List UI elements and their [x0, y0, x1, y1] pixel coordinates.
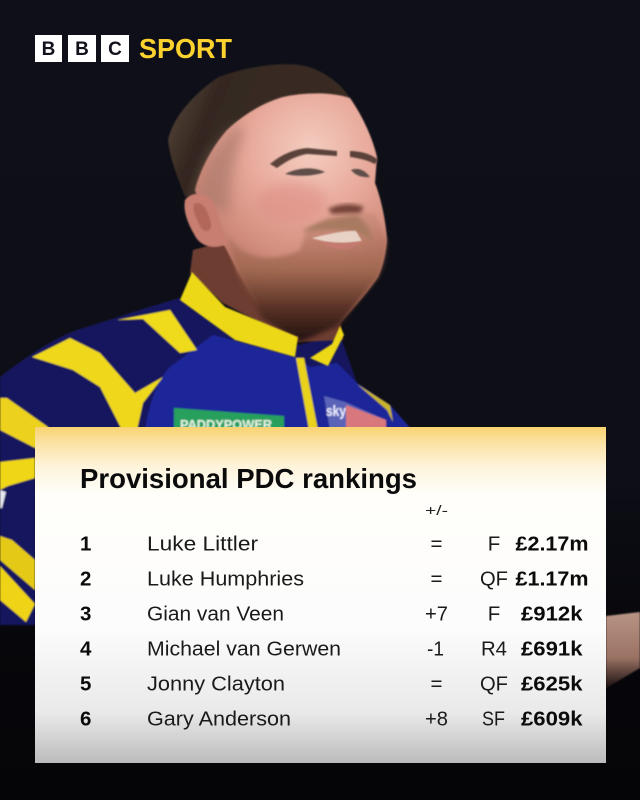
logo: BBC Sport: B	[75, 39, 89, 60]
row 1: £2.17m	[516, 532, 588, 556]
row 4: R4	[481, 638, 507, 660]
row 2	[80, 568, 588, 590]
neck	[190, 240, 343, 342]
row 6	[80, 708, 583, 730]
photo: player	[0, 64, 412, 625]
row 6: +8	[425, 708, 448, 730]
row 2: Luke Humphries	[147, 568, 304, 590]
row 6: SF	[482, 708, 505, 730]
ear inner	[194, 203, 211, 231]
hair	[168, 64, 350, 197]
collar	[180, 272, 344, 366]
row 1: =	[431, 532, 442, 556]
photo: arm at right	[606, 612, 640, 688]
row 2: £1.17m	[516, 568, 588, 590]
logo: BBC Sport	[35, 33, 232, 64]
cheek	[258, 182, 326, 222]
row 4	[80, 638, 583, 660]
eyes	[285, 168, 370, 177]
nose shadow	[328, 204, 364, 214]
row 3: F	[488, 602, 500, 626]
row 3	[80, 602, 583, 626]
eyebrows	[270, 148, 378, 168]
row 1: F	[488, 532, 500, 556]
mouth	[312, 231, 362, 243]
logo: BBC Sport: B	[42, 39, 55, 60]
logo: BBC Sport: SPORT	[139, 33, 232, 64]
row 4: £691k	[521, 638, 583, 660]
row 2: QF	[480, 568, 508, 590]
row 4: 4	[80, 638, 92, 660]
row 5: QF	[480, 672, 508, 696]
row 3: +7	[425, 602, 448, 626]
jersey: PADDYPOWER	[180, 417, 273, 432]
row 5	[80, 672, 583, 696]
row 4: -1	[427, 638, 444, 660]
row 6: Gary Anderson	[147, 708, 291, 730]
jersey: sky	[326, 403, 347, 420]
moustache	[302, 215, 373, 243]
row 2: 2	[80, 568, 91, 590]
logo: BBC Sport: C	[108, 39, 122, 60]
ear	[184, 194, 227, 247]
row 3: 3	[80, 602, 91, 626]
row 3: Gian van Veen	[147, 602, 284, 626]
beard	[227, 212, 387, 342]
row 5: 5	[80, 672, 91, 696]
face	[195, 93, 387, 337]
panel: rankings table	[35, 427, 606, 763]
row 5: =	[431, 672, 442, 696]
row 4: Michael van Gerwen	[147, 638, 341, 660]
column header: +/-	[425, 502, 448, 518]
jersey	[0, 298, 412, 625]
row 1: Luke Littler	[147, 532, 258, 556]
row 1	[80, 532, 588, 556]
side fade	[197, 125, 245, 215]
row 5: £625k	[521, 672, 583, 696]
row 2: =	[431, 568, 442, 590]
lower lip	[318, 241, 363, 249]
row 5: Jonny Clayton	[147, 672, 285, 696]
row 6: £609k	[521, 708, 583, 730]
row 6: 6	[80, 708, 91, 730]
row 3: £912k	[521, 602, 583, 626]
heading: Provisional PDC rankings	[80, 463, 417, 494]
row 1: 1	[80, 532, 91, 556]
